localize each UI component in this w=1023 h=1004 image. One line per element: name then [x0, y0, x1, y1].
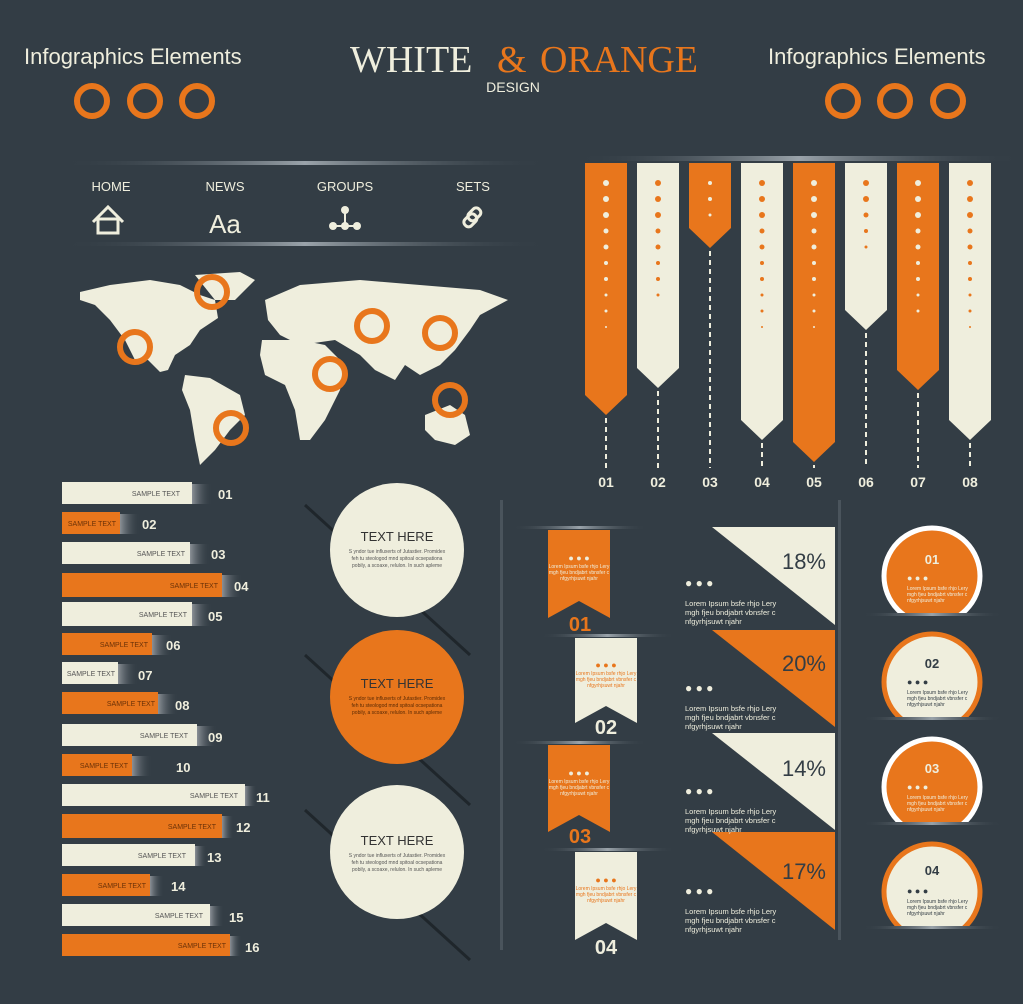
horizontal bar list: 02 [142, 517, 156, 532]
horizontal bar list: SAMPLE TEXT [170, 583, 219, 590]
ribbon tags: Lorem Ipsum bsfe rhjo Lery [576, 886, 637, 892]
right numbered circles: 04 [925, 863, 940, 878]
right numbered circles: mgh fjeu bndjabrt vbnsfer c [907, 696, 968, 702]
horizontal bar list: 01 [218, 487, 232, 502]
percentage triangles: nfgyrhjsuwt njahr [685, 722, 742, 731]
ribbon columns chart: 07 [910, 474, 926, 490]
percentage triangles: Lorem Ipsum bsfe rhjo Lery [685, 599, 777, 608]
horizontal bar list: SAMPLE TEXT [155, 913, 204, 920]
ribbon tags: ● ● ● [568, 553, 590, 563]
right numbered circles: nfgyrhjsuwt njahr [907, 702, 945, 708]
horizontal bar list: 07 [138, 668, 152, 683]
horizontal bar list [62, 482, 270, 956]
ribbon columns chart: 05 [806, 474, 822, 490]
right numbered circles: ● ● ● [907, 782, 928, 792]
right numbered circles: ● ● ● [907, 677, 928, 687]
ribbon tags: nfgyrhjsuwt njahr [560, 576, 598, 582]
ribbon tags: 02 [595, 717, 617, 739]
percentage triangles: ● ● ● [685, 784, 713, 798]
nav menu: GROUPS [317, 179, 373, 194]
horizontal bar list: 13 [207, 850, 221, 865]
title: WHITE [350, 39, 472, 81]
ribbon tags: nfgyrhjsuwt njahr [560, 791, 598, 797]
percentage triangles: mgh fjeu bndjabrt vbnsfer c [685, 916, 776, 925]
title: DESIGN [486, 79, 540, 95]
right numbered circles: Lorem Ipsum bsfe rhjo Lery [907, 586, 968, 592]
percentage triangles: nfgyrhjsuwt njahr [685, 925, 742, 934]
ribbon columns chart: 08 [962, 474, 978, 490]
percentage triangles: ● ● ● [685, 884, 713, 898]
horizontal bar list: 10 [176, 760, 190, 775]
right numbered circles: Lorem Ipsum bsfe rhjo Lery [907, 690, 968, 696]
divider vertical [500, 500, 503, 950]
ribbon tags: ● ● ● [595, 660, 617, 670]
ribbon tags: ● ● ● [595, 875, 617, 885]
ribbon tags: 03 [569, 826, 591, 848]
header right: Infographics Elements: Infographics Elements [768, 44, 986, 69]
nav menu [60, 161, 550, 246]
middle circles column [305, 483, 470, 960]
right numbered circles: nfgyrhjsuwt njahr [907, 598, 945, 604]
percentage triangles: mgh fjeu bndjabrt vbnsfer c [685, 713, 776, 722]
percentage triangles: Lorem Ipsum bsfe rhjo Lery [685, 807, 777, 816]
horizontal bar list: 14 [171, 879, 186, 894]
middle circles column: TEXT HERE [361, 676, 434, 691]
right numbered circles: 03 [925, 761, 939, 776]
percentage triangles: ● ● ● [685, 681, 713, 695]
horizontal bar list: 04 [234, 579, 249, 594]
horizontal bar list: SAMPLE TEXT [107, 701, 156, 708]
middle circles column: feh tu steologod mnd spitoal ocsepationa [352, 703, 443, 709]
ribbon tags [512, 526, 675, 959]
header right: Infographics Elements [768, 44, 986, 116]
horizontal bar list: SAMPLE TEXT [140, 733, 189, 740]
ribbon tags: mgh fjeu bndjabrt vbnsfer c [549, 785, 610, 791]
horizontal bar list: 03 [211, 547, 225, 562]
right numbered circles: nfgyrhjsuwt njahr [907, 807, 945, 813]
ribbon tags: ● ● ● [568, 768, 590, 778]
ribbon tags: Lorem Ipsum bsfe rhjo Lery [549, 779, 610, 785]
world map [80, 272, 508, 465]
middle circles column: pobily, a scoaxe, relulon. In such apleme [352, 710, 442, 716]
percentage triangles: 14% [782, 756, 826, 781]
ribbon tags: mgh fjeu bndjabrt vbnsfer c [549, 570, 610, 576]
percentage triangles: 18% [782, 549, 826, 574]
ribbon columns chart: 03 [702, 474, 718, 490]
right numbered circles: mgh fjeu bndjabrt vbnsfer c [907, 592, 968, 598]
percentage triangles: Lorem Ipsum bsfe rhjo Lery [685, 704, 777, 713]
right numbered circles: mgh fjeu bndjabrt vbnsfer c [907, 905, 968, 911]
right numbered circles: ● ● ● [907, 573, 928, 583]
percentage triangles: nfgyrhjsuwt njahr [685, 825, 742, 834]
icon: home [93, 207, 123, 233]
right numbered circles: Lorem Ipsum bsfe rhjo Lery [907, 899, 968, 905]
horizontal bar list: 05 [208, 609, 222, 624]
middle circles column: S yndor tue influxerts of Jutastier. Promidex [349, 853, 446, 859]
middle circles column: feh tu steologod mnd spitoal ocsepationa [352, 860, 443, 866]
horizontal bar list: SAMPLE TEXT [137, 551, 186, 558]
middle circles column: feh tu steologod mnd spitoal ocsepationa [352, 556, 443, 562]
horizontal bar list: 11 [256, 790, 270, 805]
ribbon tags: Lorem Ipsum bsfe rhjo Lery [576, 671, 637, 677]
percentage triangles: nfgyrhjsuwt njahr [685, 617, 742, 626]
ribbon columns chart: 06 [858, 474, 874, 490]
nav menu: HOME [92, 179, 131, 194]
ribbon tags: Lorem Ipsum bsfe rhjo Lery [549, 564, 610, 570]
ribbon tags: mgh fjeu bndjabrt vbnsfer c [576, 892, 637, 898]
ribbon columns chart: 04 [754, 474, 770, 490]
icon: Aa: Aa [209, 209, 241, 239]
horizontal bar list: 08 [175, 698, 189, 713]
horizontal bar list: SAMPLE TEXT [100, 642, 149, 649]
horizontal bar list: 15 [229, 910, 243, 925]
percentage triangles: mgh fjeu bndjabrt vbnsfer c [685, 608, 776, 617]
title [350, 39, 698, 95]
ribbon columns chart: 02 [650, 474, 666, 490]
ribbon tags: nfgyrhjsuwt njahr [587, 683, 625, 689]
horizontal bar list: SAMPLE TEXT [139, 612, 188, 619]
middle circles column: pobily, a scoaxe, relulon. In such apleme [352, 867, 442, 873]
horizontal bar list: 16 [245, 940, 259, 955]
nav menu: NEWS [206, 179, 245, 194]
horizontal bar list: SAMPLE TEXT [80, 763, 129, 770]
horizontal bar list: 12 [236, 820, 250, 835]
header left: Infographics Elements: Infographics Elements [24, 44, 242, 69]
percentage triangles: 17% [782, 859, 826, 884]
title: & [497, 39, 527, 81]
middle circles column: pobily, a scoaxe, relulon. In such apleme [352, 563, 442, 569]
horizontal bar list: SAMPLE TEXT [138, 853, 187, 860]
right numbered circles: Lorem Ipsum bsfe rhjo Lery [907, 795, 968, 801]
ribbon tags: nfgyrhjsuwt njahr [587, 898, 625, 904]
right numbered circles: nfgyrhjsuwt njahr [907, 911, 945, 917]
icon: link [462, 206, 482, 228]
horizontal bar list: 09 [208, 730, 222, 745]
right numbered circles: 01 [925, 552, 939, 567]
middle circles column: S yndor tue influxerts of Jutastier. Promidex [349, 549, 446, 555]
header left: Infographics Elements [24, 44, 242, 116]
nav menu: SETS [456, 179, 490, 194]
right numbered circles: 02 [925, 656, 939, 671]
horizontal bar list: SAMPLE TEXT [98, 883, 147, 890]
ribbon tags: 04 [595, 937, 618, 959]
horizontal bar list: SAMPLE TEXT [168, 824, 217, 831]
middle circles column: TEXT HERE [361, 833, 434, 848]
percentage triangles: Lorem Ipsum bsfe rhjo Lery [685, 907, 777, 916]
horizontal bar list: SAMPLE TEXT [190, 793, 239, 800]
horizontal bar list: 06 [166, 638, 180, 653]
icon: groups [329, 206, 361, 230]
horizontal bar list: SAMPLE TEXT [132, 491, 181, 498]
horizontal bar list: SAMPLE TEXT [67, 671, 116, 678]
horizontal bar list: SAMPLE TEXT [178, 943, 227, 950]
percentage triangles: 20% [782, 651, 826, 676]
right numbered circles: ● ● ● [907, 886, 928, 896]
middle circles column: S yndor tue influxerts of Jutastier. Promidex [349, 696, 446, 702]
ribbon columns chart [575, 156, 1023, 490]
right numbered circles: mgh fjeu bndjabrt vbnsfer c [907, 801, 968, 807]
percentage triangles: ● ● ● [685, 576, 713, 590]
horizontal bar list: SAMPLE TEXT [68, 521, 117, 528]
ribbon tags: 01 [569, 614, 591, 636]
ribbon tags: mgh fjeu bndjabrt vbnsfer c [576, 677, 637, 683]
middle circles column: TEXT HERE [361, 529, 434, 544]
percentage triangles [685, 527, 835, 934]
title: ORANGE [540, 39, 698, 81]
ribbon columns chart: 01 [598, 474, 614, 490]
percentage triangles: mgh fjeu bndjabrt vbnsfer c [685, 816, 776, 825]
right numbered circles [882, 526, 982, 929]
